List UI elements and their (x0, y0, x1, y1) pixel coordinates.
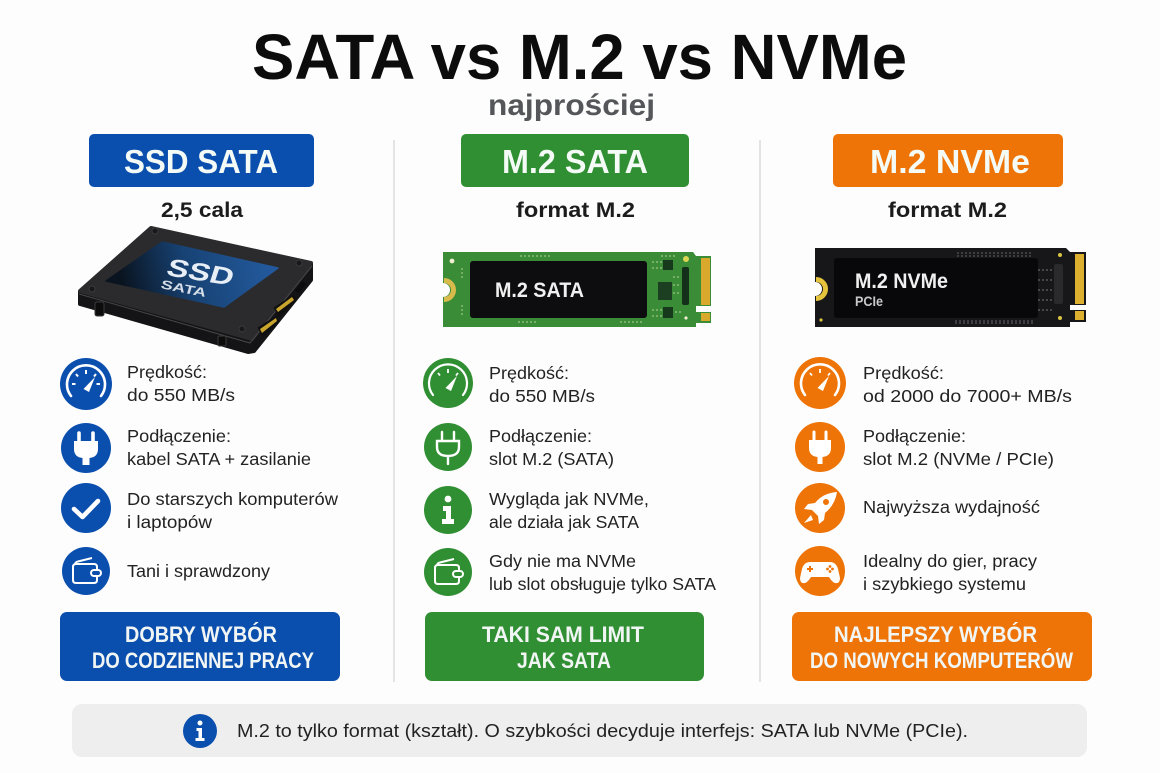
illustration: M.2 SATA module (443, 252, 711, 327)
panel: M.2 SATA (423, 134, 716, 681)
row: speed: Prędkość: (863, 363, 944, 383)
title: SATA vs M.2 vs NVMe (252, 21, 907, 93)
row: when no NVMe (424, 548, 716, 596)
row: speed: od 2000 do 7000+ MB/s (863, 386, 1072, 406)
heading: SSD SATA (89, 134, 314, 187)
panel: SSD SATA (60, 134, 340, 681)
row: when no NVMe: Gdy nie ma NVMe (489, 551, 636, 571)
illustration: M.2 NVMe module (815, 248, 1086, 327)
chip sublabel: PCIe (855, 293, 883, 309)
illustration: 2.5 inch SSD: SSD (163, 254, 238, 291)
callout: format vs interface note (72, 704, 1087, 757)
row: connection: Podłączenie: (489, 426, 592, 446)
row: speed: do 550 MB/s (127, 385, 235, 405)
icon: gamepad (795, 546, 845, 596)
row: connection (424, 423, 614, 471)
row: connection (61, 423, 311, 473)
icon: gauge (794, 357, 846, 409)
illustration: 2.5 inch SSD: SATA (159, 277, 209, 300)
heading: M.2 NVMe (833, 134, 1063, 187)
verdict: best choice for new computers (792, 612, 1092, 681)
row: games and work: i szybkiego systemu (863, 574, 1026, 594)
icon: wallet (424, 548, 472, 596)
row: connection: Podłączenie: (127, 426, 231, 446)
icon: rocket (795, 483, 845, 533)
icon: gauge (60, 358, 112, 410)
row: cheap and proven: Tani i sprawdzony (127, 561, 270, 581)
row: top performance: Najwyższa wydajność (863, 497, 1040, 517)
row: speed: Prędkość: (127, 362, 207, 382)
icon: wallet (62, 547, 110, 595)
form factor label: format M.2 (888, 199, 1007, 222)
row: older computers: i laptopów (127, 512, 212, 532)
verdict: good everyday choice: DOBRY WYBÓR (125, 622, 277, 647)
form factor label: format M.2 (516, 199, 635, 222)
verdict: same limit as SATA (425, 612, 704, 681)
icon: info (183, 714, 217, 748)
subtitle: najprościej (488, 89, 655, 122)
row: speed (423, 358, 595, 408)
heading: M.2 SATA (461, 134, 689, 187)
row: connection: kabel SATA + zasilanie (127, 449, 311, 469)
row: cheap and proven (62, 547, 270, 595)
form factor label: 2,5 cala (161, 199, 243, 222)
icon: info (424, 486, 472, 534)
verdict: best choice for new computers: NAJLEPSZY WYBÓR (834, 622, 1037, 647)
row: looks like NVMe (424, 486, 649, 534)
row: games and work (795, 546, 1037, 596)
row: connection (795, 422, 1054, 472)
heading: SSD SATA: SSD SATA (124, 143, 278, 180)
icon: gauge (423, 358, 473, 408)
illustration: M.2 SATA module: M.2 SATA (495, 279, 584, 302)
row: looks like NVMe: Wygląda jak NVMe, (489, 489, 649, 509)
icon: check mark (61, 483, 111, 533)
row: speed: do 550 MB/s (489, 386, 595, 406)
note text: M.2 to tylko format (kształt). O szybkości decyduje interfejs: SATA lub NVMe (PCIe). (237, 721, 968, 741)
verdict: same limit as SATA: JAK SATA (517, 648, 611, 673)
icon: plug (61, 423, 111, 473)
heading: M.2 NVMe: M.2 NVMe (870, 143, 1030, 180)
verdict: best choice for new computers: DO NOWYCH KOMPUTERÓW (810, 648, 1073, 673)
row: connection: Podłączenie: (863, 426, 966, 446)
row: speed (60, 358, 235, 410)
verdict: same limit as SATA: TAKI SAM LIMIT (482, 622, 645, 647)
row: speed: Prędkość: (489, 363, 569, 383)
icon: plug outline (424, 423, 472, 471)
illustration: M.2 NVMe module: M.2 NVMe (855, 270, 948, 293)
row: connection: slot M.2 (NVMe / PCIe) (863, 449, 1054, 469)
row: connection: slot M.2 (SATA) (489, 449, 614, 469)
row: top performance (795, 483, 1040, 533)
row: when no NVMe: lub slot obsługuje tylko SATA (489, 574, 716, 594)
row: looks like NVMe: ale działa jak SATA (489, 512, 639, 532)
icon: plug (795, 422, 845, 472)
row: older computers: Do starszych komputerów (127, 489, 338, 509)
row: older computers (61, 483, 338, 533)
verdict: good everyday choice (60, 612, 340, 681)
verdict: good everyday choice: DO CODZIENNEJ PRACY (92, 648, 314, 673)
illustration: 2.5 inch SSD (79, 228, 312, 352)
row: speed (794, 357, 1072, 409)
panel: M.2 NVMe (792, 134, 1092, 681)
heading: M.2 SATA: M.2 SATA (502, 143, 648, 180)
row: games and work: Idealny do gier, pracy (863, 551, 1037, 571)
